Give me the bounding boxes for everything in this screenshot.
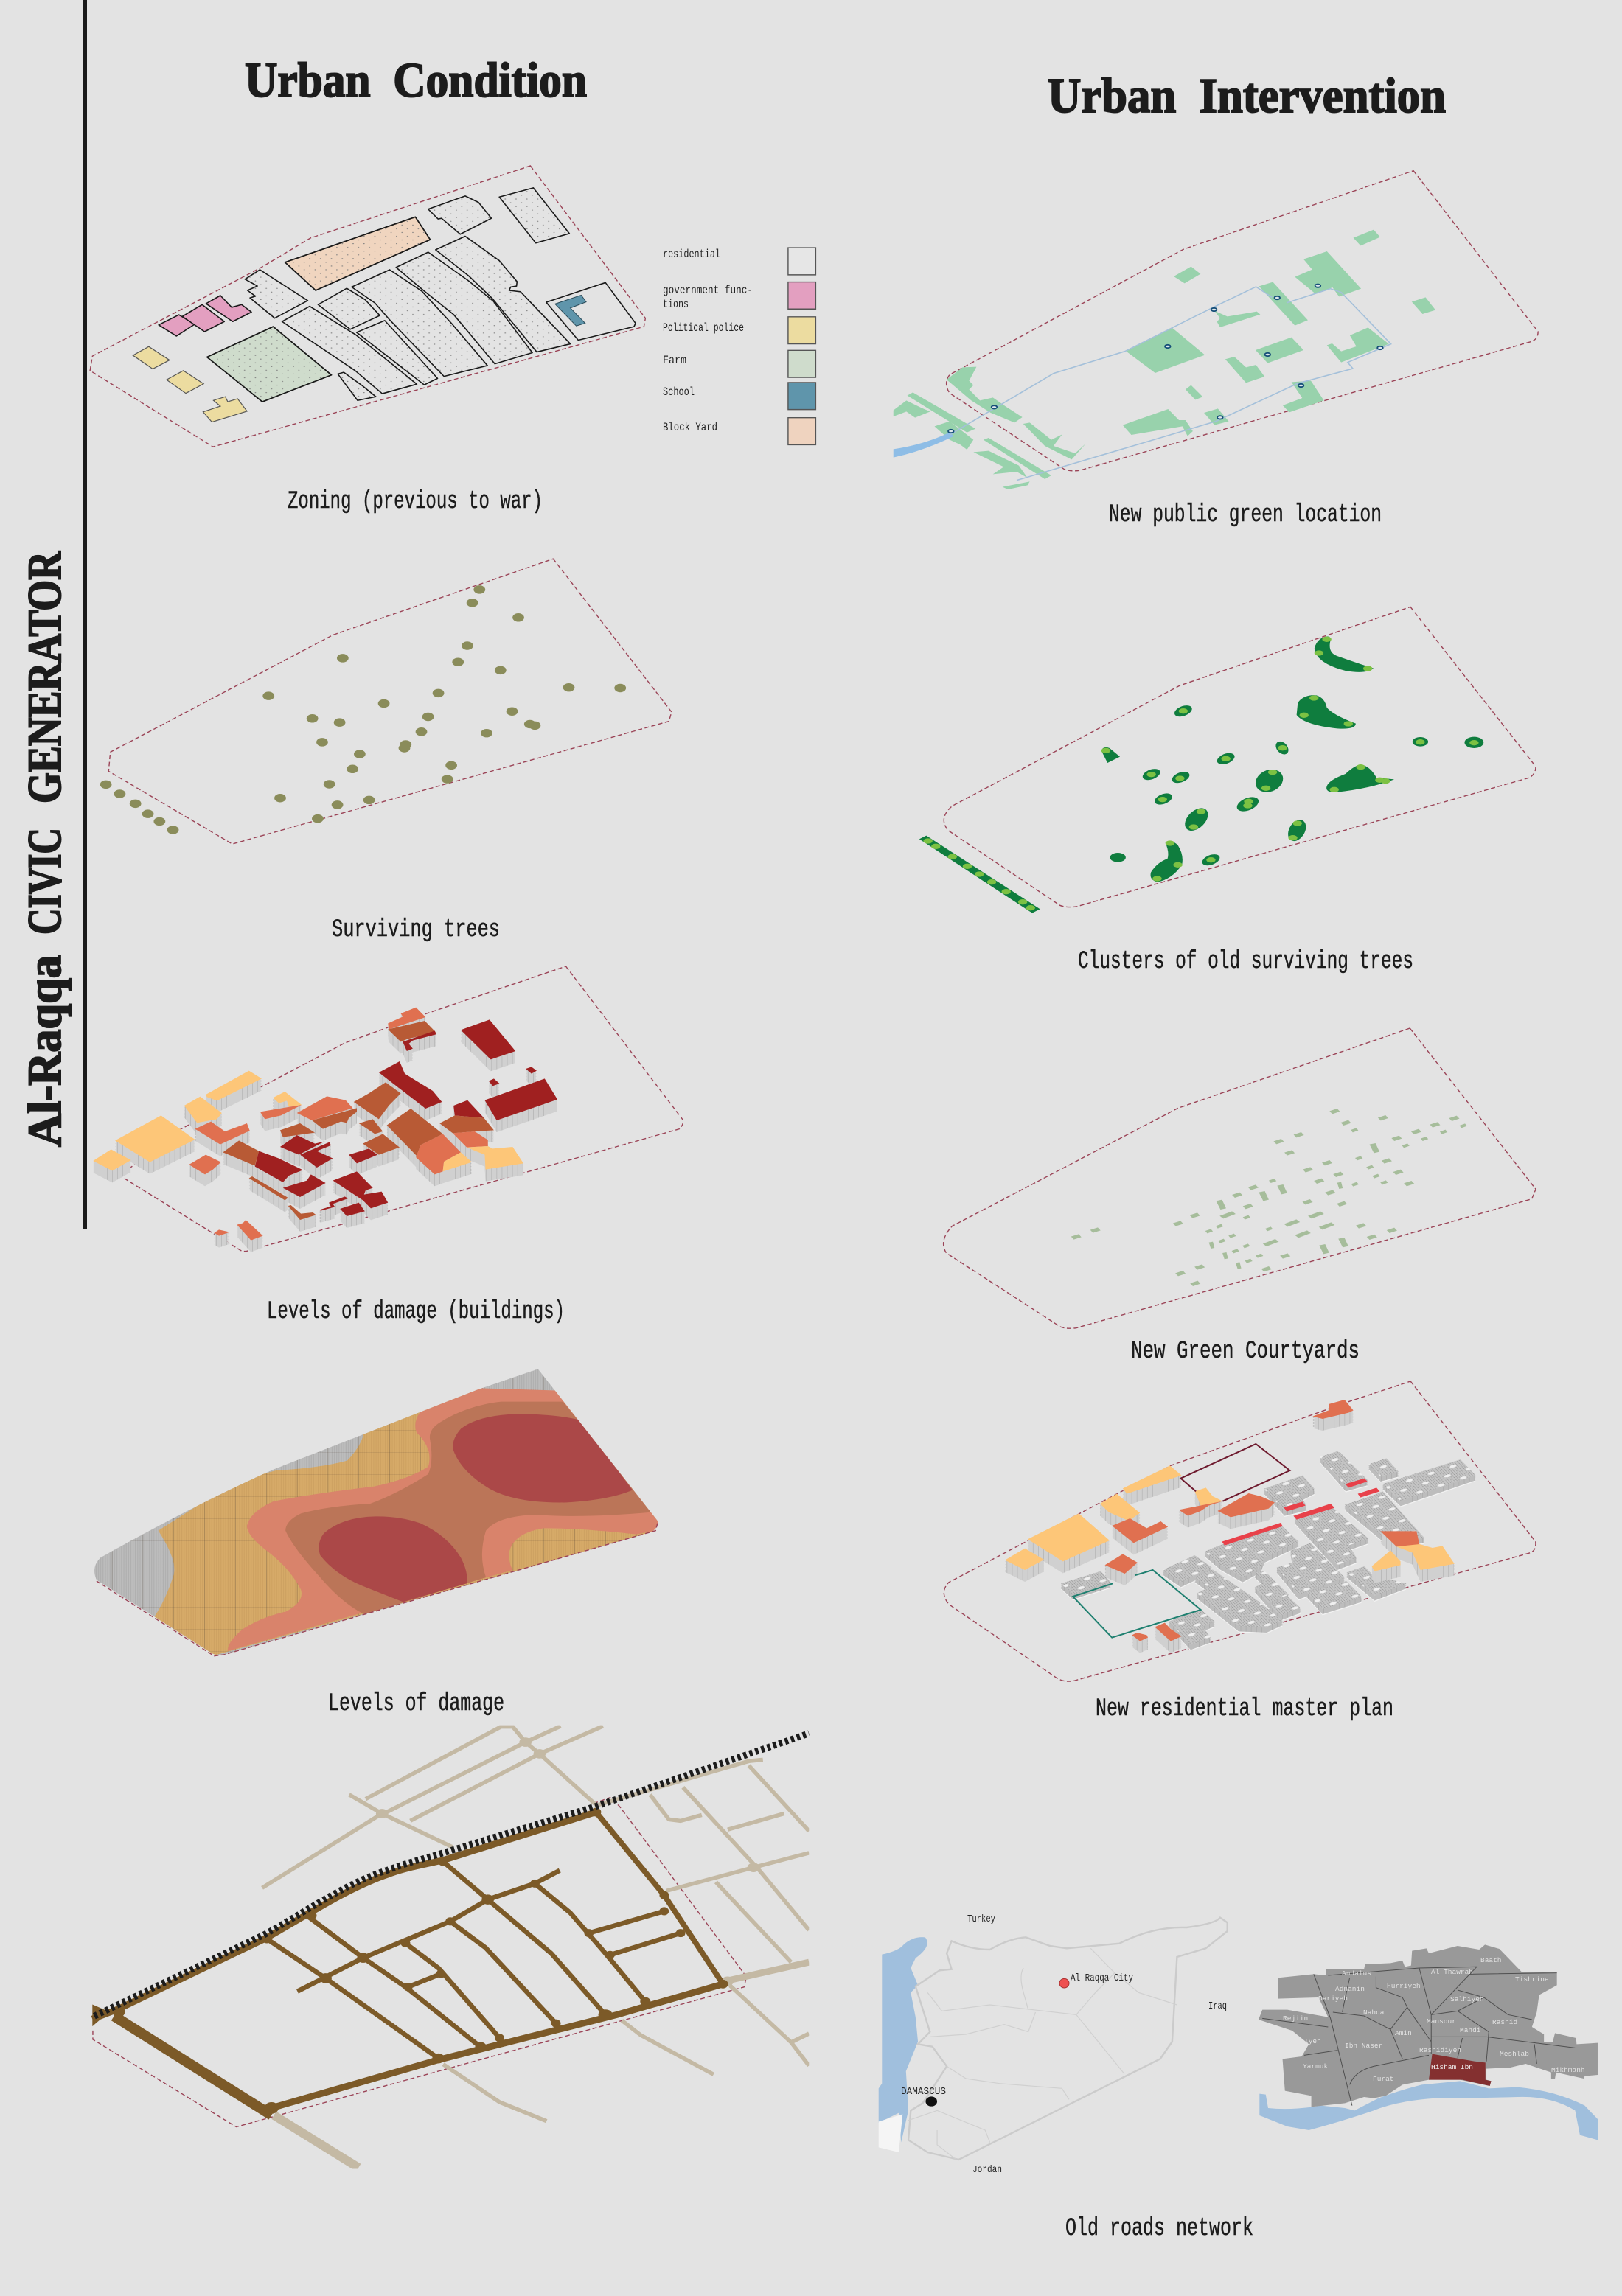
tree markers [923,637,1479,910]
district labels: Iyeh [1304,2037,1321,2045]
panel: new public green [894,171,1538,489]
panel: old roads network [92,1726,809,2168]
site boundary [947,171,1538,471]
district labels: Rashid [1492,2018,1517,2026]
heading: Urban Intervention: Urban Intervention [1048,69,1446,123]
legend labels: Farm [663,354,686,367]
marker: Al Raqqa [1059,1978,1069,1988]
district labels: Ibn Naser [1345,2042,1382,2050]
main dark roads [92,1808,728,2115]
district labels: Al Thawrah [1431,1968,1473,1976]
panel: building damage [93,966,683,1252]
district labels: Rejiin [1283,2014,1308,2023]
teal plot outline [1073,1570,1201,1638]
district labels: Baath [1480,1956,1502,1964]
legend labels: Political police [663,321,744,335]
map labels: DAMASCUS [901,2086,946,2098]
caption: green courtyards: New Green Courtyards [1131,1338,1360,1366]
panel: green courtyards [944,1028,1536,1328]
legend labels: government func- [663,284,753,297]
district labels: Amin [1395,2029,1412,2037]
site boundary [97,1524,658,1656]
circulation line [950,287,1391,481]
new residential blocks [1061,1451,1475,1645]
map labels: Turkey [967,1913,995,1925]
green areas [894,230,1435,489]
district labels: Rashidiyeh [1419,2046,1461,2054]
panel: zoning map [90,166,815,447]
marker: Damascus [925,2096,937,2107]
caption: zoning: Zoning (previous to war) [288,488,543,516]
caption: surviving trees: Surviving trees [332,916,500,944]
legend labels [663,248,753,434]
district labels: Mansour [1427,2017,1456,2025]
retained building roofs [1005,1400,1455,1641]
caption: building damage: Levels of damage (buildings) [267,1298,565,1326]
map labels: Iraq [1208,2000,1227,2012]
site boundary [90,166,645,447]
district labels: Tishrine [1515,1975,1549,1983]
legend labels: residential [663,248,720,261]
legend swatches [788,248,815,444]
site boundary [944,607,1536,907]
map labels: Jordan [972,2164,1002,2176]
new block walls [1061,1452,1475,1650]
school plot [546,282,636,340]
vertical project title: GENERATOR [18,551,72,803]
city silhouette [1259,1944,1598,2107]
farm [207,327,332,402]
maroon plot outline [1180,1444,1289,1501]
site boundary [944,1381,1536,1681]
district labels [1283,1956,1585,2083]
panel: damage heat map [94,1369,658,1657]
political police buildings [133,346,247,422]
block yard [285,217,430,290]
vertical project title: Al-Raqqa [18,955,72,1147]
retained building walls [1005,1401,1455,1653]
panel: residential master plan [944,1381,1536,1681]
sea [879,1937,927,2143]
panel: surviving trees [100,559,672,844]
district labels: Salhiyeh [1450,1995,1484,2003]
caption: damage heat map: Levels of damage [328,1690,504,1718]
district labels: Mikhmanh [1551,2066,1585,2074]
white land patch [879,2114,902,2152]
caption: old roads network: Old roads network [1065,2215,1253,2243]
railway [94,1734,809,2016]
highlighted district [1429,2054,1492,2086]
building walls [93,1009,557,1252]
district labels: Meshlab [1500,2050,1529,2058]
tree dots [100,585,626,834]
heading: Urban Condition: Urban Condition [245,53,587,108]
courtyards [1071,1109,1467,1286]
vertical rule [83,0,87,1229]
site boundary [93,1798,746,2127]
caption: new public green: New public green location [1109,501,1382,529]
stations [948,284,1383,433]
legend labels: School [663,385,695,399]
vertical project title [18,551,72,1147]
red frontage strips [1222,1479,1379,1546]
district labels: Andalus [1342,1969,1371,1978]
district labels: Yarmuk [1303,2062,1329,2070]
new block white base [1061,1456,1475,1651]
damage-coded roofs [93,1008,557,1241]
caption: tree clusters: Clusters of old surviving trees [1078,948,1413,976]
Syria outline [908,1918,1228,2160]
district labels: Nahda [1363,2009,1385,2017]
map labels: Al Raqqa City [1071,1972,1133,1984]
district lines [1262,1967,1575,2106]
map labels [901,1913,1227,2176]
panel: location maps [879,1918,1598,2160]
residential blocks [245,188,571,400]
heat zones [94,1369,658,1655]
site boundary [108,559,672,844]
vertical project title: CIVIC [18,828,72,935]
surrounding roads [262,1726,809,2168]
river [894,433,954,458]
district labels: Furat [1373,2075,1394,2083]
school building [555,295,586,326]
caption: residential master plan: New residential master plan [1096,1695,1393,1723]
panel: tree clusters [919,607,1536,913]
province lines [908,1948,1177,2160]
legend labels: tions [663,298,689,311]
district labels: Mahdi [1460,2026,1481,2034]
legend labels: Block Yard [663,421,717,434]
site boundary [944,1028,1536,1328]
site boundary [120,966,683,1252]
district labels: Hisham Ibn [1431,2063,1473,2071]
government buildings [159,296,251,336]
district labels: Adnanin [1335,1985,1365,1993]
district labels: Dariyeh [1318,1995,1348,2003]
river Euphrates [1259,2081,1598,2140]
cluster shapes [919,636,1483,913]
district labels: Hurriyeh [1387,1982,1421,1990]
